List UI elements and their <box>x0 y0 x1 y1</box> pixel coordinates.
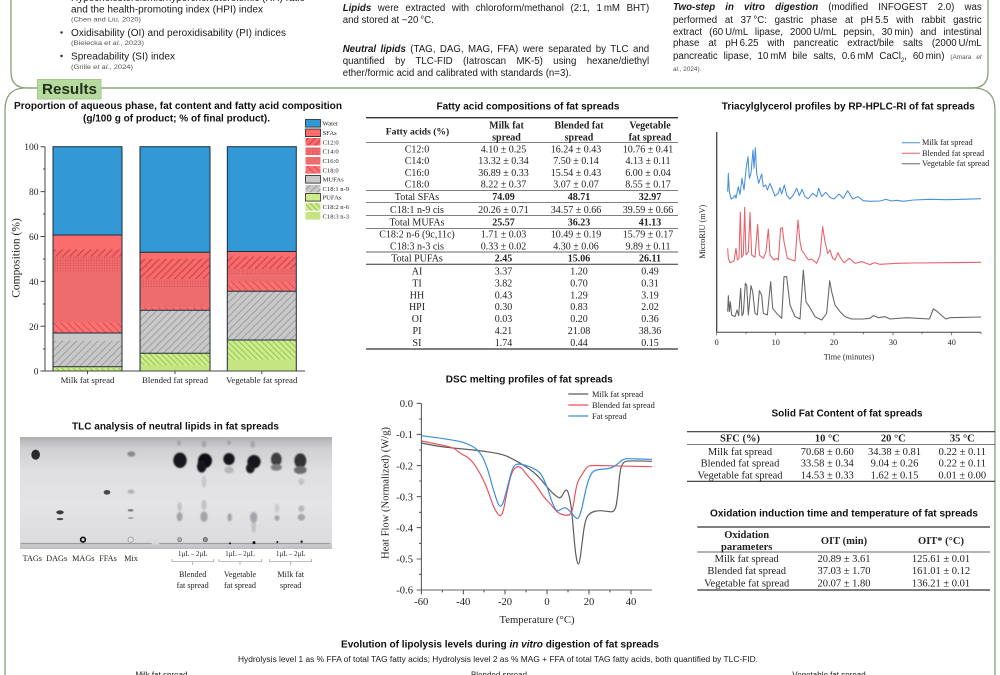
table: fatty acid compositions: Total PUFAs <box>391 254 443 265</box>
curve: milk fat spread <box>421 443 652 564</box>
table: fatty acid compositions: 36.89 ± 0.33 <box>478 168 529 179</box>
table: fatty acid compositions: 1.20 <box>570 266 588 277</box>
chart legend: composition: C18:0 <box>322 167 339 174</box>
table: fatty acid compositions: 25.57 <box>492 217 515 228</box>
TLC lane labels: 1µL – 2µL <box>276 551 305 558</box>
axis labels: -0.1 <box>396 430 413 441</box>
axes <box>40 147 305 374</box>
chart legend: composition: C12:0 <box>322 139 339 146</box>
table: fatty acid compositions: 0.33 ± 0.02 <box>481 241 526 252</box>
table: fatty acid compositions: C12:0 <box>405 144 429 155</box>
axis labels: 30 <box>889 338 897 347</box>
axis labels: Heat Flow (Normalized) (W/g) <box>380 426 392 559</box>
table: fatty acid compositions: 0.83 <box>570 302 588 313</box>
chart titles: lipolysis panels <box>135 670 866 675</box>
text block: nutritional indices: Oxidisability (OI) and peroxidisability (PI) indices <box>71 28 286 39</box>
table: fatty acid compositions: C18:3 n-3 cis <box>390 241 444 252</box>
table: fatty acid compositions: TI <box>412 278 422 289</box>
TLC lane labels: 1µL – 2µL <box>178 551 207 558</box>
table: fatty acid compositions: 10.76 ± 0.41 <box>623 144 673 155</box>
axis labels <box>698 204 956 362</box>
axis labels <box>10 143 298 385</box>
table: fatty acid compositions: 4.13 ± 0.11 <box>625 156 671 167</box>
table: fatty acid compositions: HPI <box>409 302 425 313</box>
table: oxidation induction: 161.01 ± 0.12 <box>912 566 970 577</box>
table: fatty acid compositions: Fatty acids (%) <box>386 126 449 137</box>
image: TLC plate <box>20 437 332 549</box>
table: fatty acid compositions: 3.19 <box>641 290 659 301</box>
bar: milk fat spread <box>53 147 122 371</box>
text block: nutritional indices: (Chen and Liu, 2020) <box>71 16 141 24</box>
table: oxidation induction: 20.07 ± 1.80 <box>817 578 871 590</box>
table: fatty acid compositions: PI <box>413 326 421 337</box>
chart legend: DSC <box>568 390 656 421</box>
table: fatty acid compositions: 0.70 <box>570 278 588 289</box>
table: fatty acid compositions: C18:2 n-6 (9c,11c) <box>379 230 455 241</box>
table: oxidation induction: Vegetable fat spread <box>704 578 790 590</box>
text block: nutritional indices: (Bielecka et al. , 2023) <box>71 40 144 47</box>
heading: lipolysis evolution: Evolution of lipolysis levels during in vitro digestion of fat spreads <box>341 640 659 651</box>
table: fatty acid compositions: 0.36 <box>641 314 659 325</box>
chart legend: DSC: Fat spread <box>592 412 627 421</box>
axis labels: MicroRIU (mV) <box>698 204 707 259</box>
table: fatty acid compositions: AI <box>412 266 422 277</box>
table: fatty acid compositions: 34.57 ± 0.66 <box>551 205 601 216</box>
curve: fat spread <box>421 436 652 518</box>
table: fatty acid compositions: 1.74 <box>495 338 512 349</box>
chart legend: composition: C18:1 n-9 <box>322 186 350 193</box>
table: solid fat content: 0.22 ± 0.11 <box>939 447 986 458</box>
sample smears <box>177 440 305 533</box>
axis labels: -0.2 <box>396 461 413 472</box>
TLC lane labels: Milk fat <box>277 570 305 579</box>
table: oxidation induction <box>697 527 990 590</box>
axis labels: Time (minutes) <box>824 352 874 362</box>
table: fatty acid compositions: spread <box>565 132 594 144</box>
stacked bar chart: composition <box>10 143 305 385</box>
text block: lipid extraction methods <box>343 3 649 79</box>
chart legend: composition: C14:0 <box>322 149 339 156</box>
table: fatty acid compositions: 0.03 <box>495 314 512 325</box>
table: fatty acid compositions: 15.06 <box>568 254 590 265</box>
table: fatty acid compositions: 20.26 ± 0.71 <box>478 205 529 216</box>
table: fatty acid compositions: C14:0 <box>405 156 429 167</box>
axis labels: 10 <box>772 338 780 347</box>
text block: lipid extraction methods: and stored at −20 °C. <box>343 15 434 26</box>
table: solid fat content: 33.58 ± 0.34 <box>801 458 855 470</box>
table: fatty acid compositions: 0.30 <box>495 302 512 313</box>
axis labels: Vegetable fat spread <box>226 375 298 385</box>
chart legend: composition: C16:0 <box>322 158 339 165</box>
table: fatty acid compositions: 0.43 <box>495 290 512 301</box>
table: oxidation induction: parameters <box>721 542 772 553</box>
table: fatty acid compositions: 1.29 <box>570 290 588 301</box>
TLC lane labels: FFAs <box>99 554 117 563</box>
axis labels: 0 <box>34 368 39 378</box>
table: solid fat content: 10 °C <box>815 434 840 444</box>
chart legend: composition: MUFAs <box>322 177 344 184</box>
axis labels: -0.4 <box>396 523 414 534</box>
table: oxidation induction: OIT* (°C) <box>918 536 964 547</box>
curve: blended fat spread <box>421 441 652 516</box>
table: solid fat content: 0.22 ± 0.11 <box>939 458 986 470</box>
table: fatty acid compositions: 38.36 <box>639 326 661 337</box>
axis labels: 100 <box>24 143 39 153</box>
table: oxidation induction: Blended fat spread <box>707 566 787 577</box>
table: solid fat content: 20 °C <box>881 434 906 444</box>
axis labels: -60 <box>414 597 428 608</box>
table: fatty acid compositions: HH <box>410 290 424 301</box>
text block: hydrolysis definition: Hydrolysis level 1 as % FFA of total TAG fatty acids; Hydrolysis level 2 as % MAG + FFA of total TAG fatty acids, both quantified by TLC-FID. <box>238 655 758 664</box>
line chart: triacylglycerol HPLC profiles <box>698 132 981 362</box>
TLC lane labels: TAGs <box>23 554 42 563</box>
text block: lipid extraction methods: ether/formic acid and calibrated with standards (n=3). <box>343 68 571 79</box>
text block: lipid extraction methods: Lipids were extracted with chloroform/methanol (2:1, 1 mM BHT) <box>343 3 649 14</box>
table: fatty acid compositions: 74.09 <box>492 192 515 203</box>
table: solid fat content: 70.68 ± 0.60 <box>801 447 854 458</box>
heading: TLC: TLC analysis of neutral lipids in fat spreads <box>72 421 279 432</box>
text block: in vitro digestion method: Two-step in vitro digestion (modified INFOGEST 2.0) was <box>673 2 982 13</box>
table: fatty acid compositions: 21.08 <box>568 326 590 337</box>
chart legend: composition: C18:3 n-3 <box>322 213 350 220</box>
table: fatty acid compositions: 15.54 ± 0.43 <box>551 168 601 179</box>
chart legend: HPLC: Blended fat spread <box>922 149 985 158</box>
chart legend: composition: Water <box>322 120 339 128</box>
TLC lane labels <box>23 551 312 590</box>
chart legend: composition: SFAs <box>322 130 337 137</box>
axis labels: 80 <box>29 188 39 198</box>
chart legend: HPLC: Vegetable fat spread <box>922 159 990 168</box>
table: fatty acid compositions: 6.00 ± 0.04 <box>625 168 671 179</box>
chart legend: composition <box>306 120 350 220</box>
table: fatty acid compositions: C18:1 n-9 cis <box>390 205 444 216</box>
table: fatty acid compositions: 8.55 ± 0.17 <box>625 180 671 191</box>
axis labels: -0.6 <box>396 586 413 597</box>
table: fatty acid compositions: 0.31 <box>641 278 659 289</box>
axis labels: 40 <box>948 338 956 347</box>
heading badge: Results <box>38 80 101 99</box>
table: fatty acid compositions: 26.11 <box>639 254 661 265</box>
text block: nutritional indices <box>60 0 305 71</box>
panel: methods outline <box>11 0 988 88</box>
axis labels: Composition (%) <box>10 218 22 298</box>
table: fatty acid compositions: 0.44 <box>570 338 588 349</box>
table: fatty acid compositions: 36.23 <box>568 217 590 228</box>
table: fatty acid compositions: 13.32 ± 0.34 <box>478 156 529 167</box>
bar: blended fat spread <box>140 147 210 371</box>
table: fatty acid compositions: C18:0 <box>405 180 429 191</box>
text block: nutritional indices: (Grille et al. , 2024) <box>71 64 133 71</box>
heading: oxidation induction: Oxidation induction time and temperature of fat spreads <box>710 509 978 520</box>
chart legend: DSC: Blended fat spread <box>592 401 656 410</box>
heading: DSC: DSC melting profiles of fat spreads <box>446 375 613 386</box>
curve: vegetable fat spread <box>728 270 981 320</box>
axis labels: 20 <box>830 338 838 347</box>
chart legend: DSC: Milk fat spread <box>592 390 644 399</box>
table: solid fat content: 35 °C <box>950 434 975 444</box>
axis labels: -0.3 <box>396 492 413 503</box>
heading: composition chart: (g/100 g of product; % of final product). <box>83 114 270 124</box>
text block: in vitro digestion method: phase at pH 6.25 with pancreatic extract/bile salts (2000 U/mL <box>673 38 982 49</box>
axis labels: 20 <box>29 323 39 333</box>
table: fatty acid compositions: 2.02 <box>641 302 659 313</box>
heading: composition chart <box>14 101 342 124</box>
table: fatty acid compositions: C16:0 <box>405 168 429 179</box>
table: fatty acid compositions: 0.20 <box>570 314 588 325</box>
curve: blended fat spread <box>728 207 981 265</box>
axis labels: 0 <box>544 597 550 608</box>
axis labels: 40 <box>29 278 39 288</box>
table: fatty acid compositions: fat spread <box>629 132 672 144</box>
table: fatty acid compositions: Total SFAs <box>395 192 439 203</box>
table: oxidation induction: Oxidation <box>724 530 769 541</box>
table: fatty acid compositions: 4.30 ± 0.06 <box>553 241 599 252</box>
text block: nutritional indices: Spreadability (SI) index <box>71 51 175 62</box>
curve: milk fat spread <box>728 148 981 201</box>
table: solid fat content: 1.62 ± 0.15 <box>871 470 918 482</box>
TLC lane labels: MAGs <box>72 554 94 563</box>
TLC lane labels: fat spread <box>177 581 209 590</box>
table: fatty acid compositions: 4.10 ± 0.25 <box>481 144 526 155</box>
axis labels: -20 <box>498 597 512 608</box>
table: oxidation induction: 20.89 ± 3.61 <box>817 554 871 565</box>
table: fatty acid compositions: 9.89 ± 0.11 <box>625 241 671 252</box>
table: fatty acid compositions: 48.71 <box>568 192 590 203</box>
TLC lane labels: Mix <box>124 554 138 563</box>
table: fatty acid compositions: 4.21 <box>495 326 512 337</box>
text block: lipid extraction methods: Neutral lipids (TAG, DAG, MAG, FFA) were separated by TLC and <box>343 44 649 55</box>
axis labels: 0 <box>715 338 719 347</box>
table: fatty acid compositions: 15.79 ± 0.17 <box>623 230 673 241</box>
table: fatty acid compositions: 0.15 <box>641 338 659 349</box>
table: fatty acid compositions: 16.24 ± 0.43 <box>551 144 601 155</box>
table: oxidation induction: 136.21 ± 0.01 <box>912 578 970 590</box>
text block: in vitro digestion method: al., 2024). <box>673 66 701 73</box>
table: fatty acid compositions: 7.50 ± 0.14 <box>553 156 599 167</box>
axis labels: -40 <box>456 597 470 608</box>
text block: in vitro digestion method: performed at 37 °C: gastric phase at pH 5.5 with rabbit gastric <box>673 15 982 26</box>
table: solid fat content: 0.01 ± 0.00 <box>938 470 986 482</box>
table: fatty acid compositions: Vegetable <box>629 120 671 131</box>
table: fatty acid compositions: 2.45 <box>495 254 512 265</box>
text block: in vitro digestion method: extract (60 U/mL lipase, 2000 U/mL pepsin, 30 min) and intestinal <box>673 27 982 38</box>
table: fatty acid compositions: Total MUFAs <box>390 217 445 228</box>
axis labels <box>380 399 636 626</box>
TLC lane labels: spread <box>280 581 301 590</box>
table: fatty acid compositions: Blended fat <box>554 120 604 131</box>
table: solid fat content: 9.04 ± 0.26 <box>871 458 918 470</box>
chart legend: composition: PUFAs <box>322 195 342 202</box>
table: solid fat content <box>687 432 995 482</box>
table: oxidation induction: Milk fat spread <box>715 554 780 565</box>
TLC lane labels: Vegetable <box>224 570 257 579</box>
table: solid fat content: 14.53 ± 0.33 <box>801 470 854 482</box>
heading badge: Results: Results <box>42 82 97 98</box>
table: oxidation induction: 125.61 ± 0.01 <box>912 554 970 565</box>
axis labels: -0.5 <box>396 555 413 566</box>
table: fatty acid compositions: 3.07 ± 0.07 <box>553 180 599 191</box>
heading: fatty acid table: Fatty acid compositions of fat spreads <box>436 101 620 112</box>
heading: solid fat content: Solid Fat Content of fat spreads <box>772 408 923 419</box>
TLC lane labels: Blended <box>179 570 206 579</box>
table: fatty acid compositions: OI <box>412 314 422 325</box>
TLC lane labels: DAGs <box>46 554 67 563</box>
table: fatty acid compositions: 1.71 ± 0.03 <box>481 230 526 241</box>
table: fatty acid compositions: 3.37 <box>495 266 512 277</box>
chart legend: composition: C18:2 n-6 <box>322 204 350 211</box>
axis labels: 40 <box>626 597 636 608</box>
heading: composition chart: Proportion of aqueous phase, fat content and fatty acid composition <box>14 101 342 112</box>
axis labels: Milk fat spread <box>61 375 115 385</box>
spotting baseline <box>21 542 330 545</box>
axis labels: Blended fat spread <box>142 375 209 385</box>
table: fatty acid compositions: 3.82 <box>495 278 512 289</box>
chart legend: HPLC: Milk fat spread <box>922 138 974 147</box>
table: fatty acid compositions: 32.97 <box>639 192 661 203</box>
table: solid fat content: Blended fat spread <box>701 458 780 470</box>
table: solid fat content: SFC (%) <box>720 434 760 444</box>
table: fatty acid compositions: 0.49 <box>641 266 659 277</box>
table: fatty acid compositions: 41.13 <box>639 217 661 228</box>
axis labels: 20 <box>584 597 594 608</box>
text block: nutritional indices: and the health-promoting index (HPI) index <box>71 4 263 15</box>
table: oxidation induction: OIT (min) <box>821 536 868 547</box>
axis labels: Temperature (°C) <box>499 614 575 626</box>
table: fatty acid compositions: Milk fat <box>489 120 525 131</box>
bar: vegetable fat spread <box>227 147 296 371</box>
axis labels: 0.0 <box>400 399 413 410</box>
table: solid fat content: Vegetable fat spread <box>697 470 783 482</box>
text block: lipid extraction methods: quantified by TLC-FID (Iatroscan MK-5) using hexane/diethyl <box>343 56 649 67</box>
TLC lane labels: fat spread <box>224 581 256 590</box>
chart legend: HPLC <box>902 138 990 168</box>
table: fatty acid compositions: spread <box>492 132 521 144</box>
text block: in vitro digestion method <box>673 2 982 73</box>
table: fatty acid compositions: 10.49 ± 0.19 <box>551 230 601 241</box>
table: fatty acid compositions <box>366 118 678 349</box>
axis labels: 60 <box>29 233 39 243</box>
line chart: DSC melting profiles <box>380 399 652 626</box>
sample TAG spots <box>173 453 307 474</box>
table: fatty acid compositions: 39.59 ± 0.66 <box>623 205 673 216</box>
sample origin spots <box>178 538 303 544</box>
TLC lane labels: 1µL – 2µL <box>225 551 255 558</box>
table: oxidation induction: 37.03 ± 1.70 <box>817 566 871 577</box>
axes <box>417 403 652 594</box>
table: solid fat content: 34.38 ± 0.81 <box>868 447 921 458</box>
table: solid fat content: Milk fat spread <box>708 447 773 458</box>
table: fatty acid compositions: 8.22 ± 0.37 <box>481 180 526 191</box>
table: fatty acid compositions: SI <box>413 338 421 349</box>
axes <box>717 132 981 335</box>
heading: HPLC chart: Triacylglycerol profiles by RP-HPLC-RI of fat spreads <box>722 101 975 112</box>
standards spots <box>31 450 135 542</box>
